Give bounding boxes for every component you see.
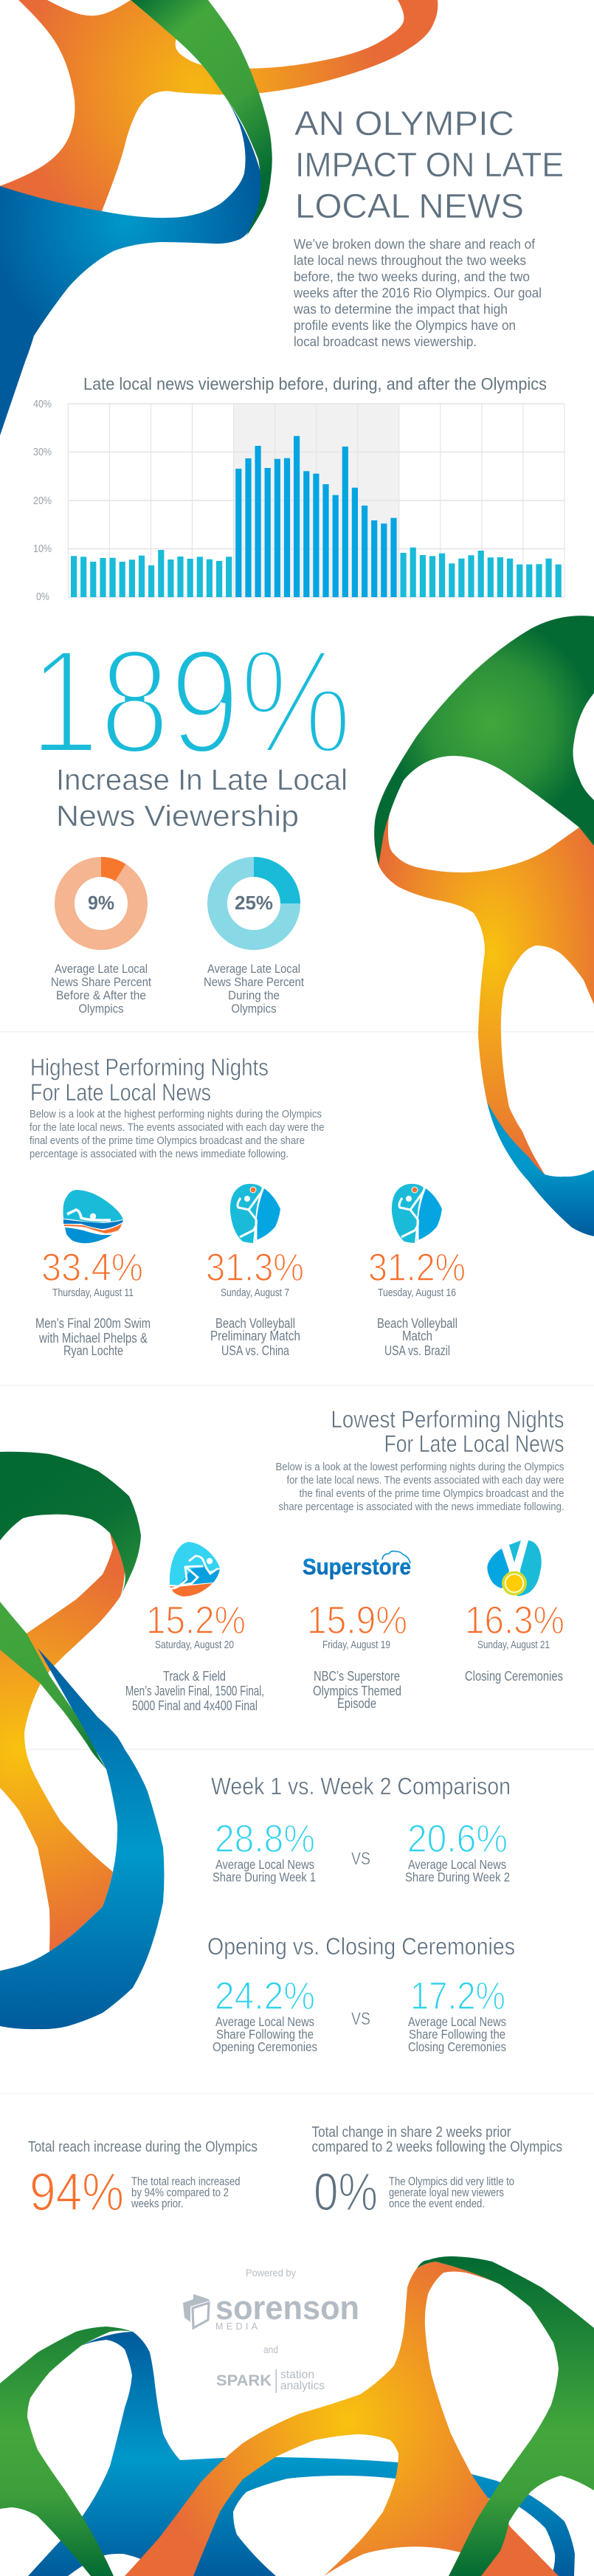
label: closing: Closing Ceremonies: [408, 2039, 506, 2054]
panel: total reach increase: [28, 2139, 258, 2222]
sub wordmark: station: [280, 2369, 314, 2381]
number: 189%: [30, 618, 352, 785]
description: [377, 1316, 457, 1358]
column: 33.4% swimming: [35, 1190, 151, 1358]
intro paragraph: late local news throughout the two weeks: [294, 253, 526, 268]
text: lowest nights intro: the final events of the prime time Olympics broadcast and the: [300, 1487, 564, 1500]
left ribbon artwork: [0, 1452, 164, 2029]
description: Match: [402, 1329, 432, 1343]
description: [125, 1669, 264, 1713]
description: Beach Volleyball: [377, 1316, 457, 1331]
sub wordmark: analytics: [280, 2380, 325, 2392]
description: The total reach increased: [131, 2176, 241, 2188]
title: AN OLYMPIC: [294, 104, 514, 142]
description: NBC’s Superstore: [314, 1669, 400, 1684]
text: and: and: [263, 2343, 278, 2355]
text: powered by: Powered by: [246, 2267, 296, 2279]
value: 25%: [235, 892, 273, 914]
description: Men’s Javelin Final, 1500 Final,: [125, 1684, 264, 1698]
description: Track & Field: [163, 1669, 226, 1684]
bars before olympics: [71, 550, 232, 597]
stat: 94%: [30, 2163, 124, 2222]
label: News Share Percent: [204, 975, 304, 989]
date: Sunday, August 21: [477, 1639, 550, 1651]
ring: [65, 867, 137, 940]
description: 5000 Final and 4x400 Final: [132, 1698, 258, 1713]
text: highest nights intro: percentage is associated with the news immediate following.: [30, 1148, 289, 1160]
stat: week 1: 28.8%: [215, 1817, 315, 1861]
heading: Total reach increase during the Olympics: [28, 2139, 258, 2155]
label: week 1: Average Local News: [215, 1857, 314, 1872]
icon: superstore logo: Superstore: [303, 1554, 411, 1580]
description: [131, 2176, 241, 2210]
description: USA vs. Brazil: [384, 1343, 450, 1358]
label: Olympics: [232, 1002, 276, 1016]
description: Beach Volleyball: [215, 1316, 295, 1331]
intro paragraph: [293, 237, 542, 349]
chart title: Late local news viewership before, during, and after the Olympics: [83, 374, 547, 393]
column: 15.9% superstore: [303, 1551, 411, 1711]
axis labels: 10%: [33, 543, 52, 555]
heading: lowest performing nights: [331, 1406, 564, 1457]
value: 16.3%: [465, 1599, 564, 1642]
ribbon: orange: [125, 2262, 559, 2576]
value: 31.2%: [368, 1246, 466, 1289]
wordmark: SPARK: [216, 2372, 272, 2389]
value: 9%: [88, 892, 114, 914]
ribbon: blue: [0, 1648, 164, 2029]
donut: 9% before and after: [51, 857, 151, 1016]
description: USA vs. China: [221, 1343, 290, 1358]
vs: VS: [351, 2009, 370, 2029]
description: Olympics Themed: [313, 1684, 401, 1698]
text: lowest nights intro: [276, 1461, 564, 1513]
date: Thursday, August 11: [52, 1287, 134, 1299]
label: week 1: Share During Week 1: [213, 1870, 316, 1884]
ribbon: orange: [0, 1533, 125, 1952]
description: with Michael Phelps &: [38, 1331, 148, 1346]
header ribbon artwork: [0, 0, 438, 435]
stat: week 2: 20.6%: [407, 1817, 508, 1861]
sub wordmark: [280, 2369, 325, 2392]
label: [204, 962, 304, 1016]
date: Tuesday, August 16: [378, 1287, 456, 1299]
right ribbon artwork: [374, 616, 594, 1236]
value: 31.3%: [206, 1246, 304, 1289]
date: Sunday, August 7: [221, 1287, 289, 1299]
wedge: [254, 857, 300, 903]
ribbon: green left: [0, 2327, 133, 2576]
axis labels: 20%: [33, 495, 52, 507]
axis labels: 30%: [33, 446, 52, 458]
label: News Share Percent: [51, 975, 151, 989]
intro paragraph: was to determine the impact that high: [293, 302, 508, 317]
text: highest nights intro: for the late local news. The events associated with each day were the: [30, 1121, 325, 1134]
ribbon: green: [374, 616, 594, 865]
value: 33.4%: [41, 1246, 143, 1289]
date: Friday, August 19: [322, 1639, 390, 1651]
label: opening: Share Following the: [216, 2027, 314, 2042]
olympics period shading: [234, 404, 399, 597]
panel: total change in share: [311, 2124, 562, 2222]
heading: highest performing nights: Highest Performing Nights: [30, 1054, 269, 1081]
ribbon: blue: [28, 2332, 575, 2576]
description: Closing Ceremonies: [465, 1669, 563, 1684]
separators: [0, 1031, 594, 2095]
label: week 2: [405, 1857, 510, 1884]
wordmark: sorenson: [215, 2289, 359, 2327]
label: closing: [408, 2014, 506, 2054]
label: week 2: Share During Week 2: [405, 1870, 510, 1884]
description: The Olympics did very little to: [389, 2176, 514, 2188]
label: closing: Share Following the: [409, 2027, 505, 2042]
description: generate loyal new viewers: [389, 2187, 504, 2200]
ribbon: green diagonal: [0, 1602, 106, 1769]
ribbon: blue: [487, 1102, 594, 1236]
label: week 1: [213, 1857, 316, 1884]
date: Saturday, August 20: [155, 1639, 234, 1651]
description: [35, 1316, 151, 1358]
panel: week 1 vs week 2: [211, 1773, 511, 1884]
title: [294, 104, 564, 225]
donut: 25% during: [204, 857, 304, 1016]
description: Ryan Lochte: [63, 1343, 123, 1358]
heading: [311, 2124, 562, 2155]
intro paragraph: local broadcast news viewership.: [294, 334, 477, 349]
axis labels: 40%: [33, 398, 52, 410]
value: 15.2%: [146, 1599, 246, 1642]
ribbon: green right: [417, 2256, 594, 2576]
description: Preliminary Match: [210, 1329, 300, 1343]
wedge: [101, 857, 125, 881]
heading: Total change in share 2 weeks prior: [311, 2124, 511, 2141]
description: by 94% compared to 2: [131, 2187, 229, 2200]
title: LOCAL NEWS: [295, 187, 524, 225]
label: [51, 962, 151, 1016]
logo: spark station analytics: [216, 2369, 325, 2393]
intro paragraph: before, the two weeks during, and the two: [294, 269, 530, 284]
icon: runner: [170, 1542, 220, 1597]
axis labels: 0%: [36, 590, 49, 603]
bars after olympics: [400, 548, 562, 597]
ribbon: orange: [374, 780, 594, 1174]
divider: [276, 2369, 277, 2393]
big stat: 189%: News Viewership: [56, 800, 299, 833]
text: highest nights intro: [30, 1108, 325, 1160]
intro paragraph: profile events like the Olympics have on: [294, 318, 516, 333]
heading: highest performing nights: For Late Local News: [30, 1079, 211, 1106]
label: Average Late Local: [207, 962, 300, 976]
intro paragraph: weeks after the 2016 Rio Olympics. Our goal: [293, 286, 542, 300]
bars during olympics: [235, 436, 397, 597]
label: Average Late Local: [55, 962, 148, 976]
text: highest nights intro: Below is a look at the highest performing nights during the Olympics: [30, 1108, 322, 1120]
description: [389, 2176, 514, 2210]
icon: volleyball player: [392, 1184, 442, 1243]
panel: opening vs closing ceremonies: [207, 1933, 515, 2054]
icon: medal: [487, 1540, 542, 1596]
column: 31.2% beach volleyball: [368, 1184, 466, 1358]
description: [313, 1669, 401, 1711]
ribbon: white gap: [68, 2554, 144, 2576]
heading: Opening vs. Closing Ceremonies: [207, 1933, 515, 1960]
icon: sorenson mark: [183, 2294, 210, 2328]
ribbon: green top: [0, 1452, 141, 1597]
icon: volleyball player: [230, 1184, 280, 1243]
description: Men’s Final 200m Swim: [35, 1316, 151, 1331]
description: Episode: [337, 1696, 376, 1711]
description: once the event ended.: [389, 2198, 485, 2210]
column: 16.3% closing ceremonies: [465, 1540, 564, 1684]
footer ribbon artwork: [0, 2256, 594, 2576]
stat: 0%: [314, 2163, 378, 2222]
axis labels: [33, 398, 52, 603]
icon: swimmer: [63, 1190, 123, 1243]
label: During the: [228, 988, 280, 1002]
title: IMPACT ON LATE: [295, 145, 564, 184]
intro paragraph: We’ve broken down the share and reach of: [294, 237, 536, 252]
big stat: 189%: [30, 618, 352, 833]
stat: opening: 24.2%: [215, 1974, 315, 2018]
caption: Increase In Late Local: [56, 764, 348, 796]
ring: [217, 867, 291, 940]
label: opening: Average Local News: [215, 2014, 314, 2029]
ribbon: orange: [0, 0, 438, 216]
heading: highest performing nights: [30, 1054, 269, 1106]
vs: VS: [351, 1849, 370, 1869]
description: weeks prior.: [131, 2198, 183, 2210]
label: opening: Opening Ceremonies: [213, 2039, 317, 2054]
heading: lowest performing nights: Lowest Performing Nights: [331, 1406, 564, 1433]
column: 31.3% beach volleyball: [206, 1184, 304, 1358]
text: highest nights intro: final events of the prime time Olympics broadcast and the share: [30, 1134, 305, 1147]
label: closing: Average Local News: [408, 2014, 506, 2029]
bar chart: viewership before, during, after: [33, 374, 564, 603]
heading: Week 1 vs. Week 2 Comparison: [211, 1773, 511, 1800]
label: Before & After the: [56, 988, 146, 1002]
ribbon: blue: [0, 94, 263, 435]
label: opening: [213, 2014, 317, 2054]
logo: sorenson media: [183, 2289, 359, 2332]
stat: closing: 17.2%: [410, 1974, 505, 2018]
value: 15.9%: [307, 1599, 407, 1642]
description: [210, 1316, 300, 1358]
column: 15.2% track and field: [125, 1542, 264, 1713]
ribbon: green: [131, 0, 272, 236]
sub wordmark: MEDIA: [215, 2321, 258, 2332]
label: Olympics: [78, 1002, 124, 1016]
label: week 2: Average Local News: [408, 1857, 506, 1872]
